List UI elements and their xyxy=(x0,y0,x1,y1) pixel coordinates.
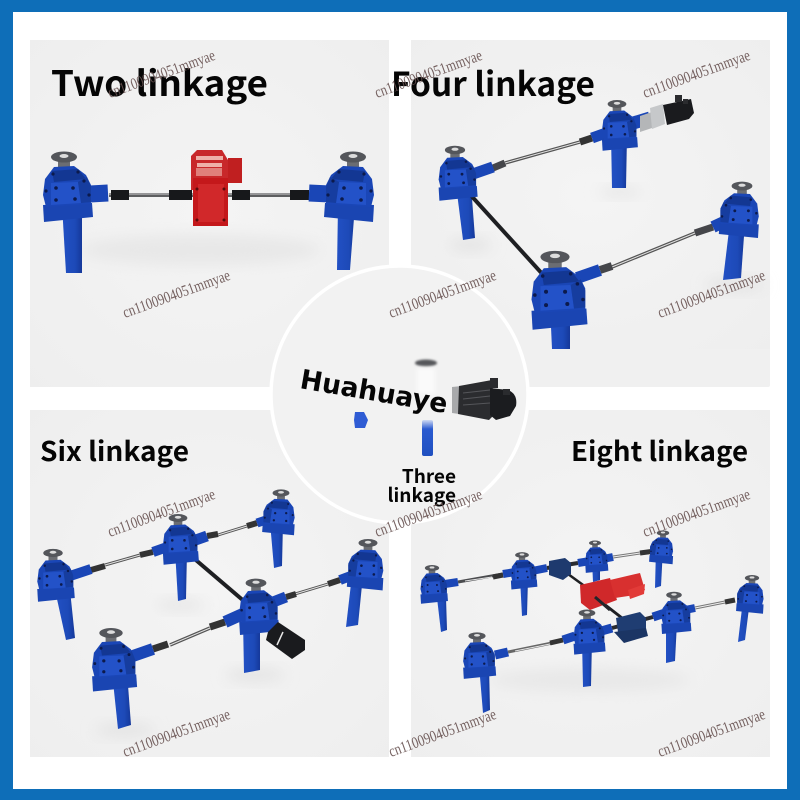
front shaft line xyxy=(495,600,735,655)
panel: two linkage xyxy=(30,40,389,387)
heading: two linkage: Two linkage xyxy=(51,56,268,107)
watermarks: cn1100904051mmyae xyxy=(387,706,499,761)
heading: eight linkage: Eight linkage xyxy=(571,430,748,469)
watermarks: cn1100904051mmyae xyxy=(106,486,218,541)
panel: four linkage xyxy=(411,40,770,387)
panel: eight linkage xyxy=(411,410,770,757)
diagram: two linkage jacks and red motor xyxy=(43,150,374,273)
watermarks: cn1100904051mmyae xyxy=(641,486,753,541)
heading: six linkage: Six linkage xyxy=(40,430,189,469)
rear shaft line xyxy=(445,551,655,584)
watermarks xyxy=(106,47,768,761)
heading: four linkage: Four linkage xyxy=(391,58,595,106)
watermarks: cn1100904051mmyae xyxy=(373,47,485,102)
panel: six linkage xyxy=(30,410,389,757)
icon: servo motor xyxy=(452,378,516,420)
watermarks: cn1100904051mmyae xyxy=(106,47,218,102)
watermarks: cn1100904051mmyae xyxy=(373,486,485,541)
watermarks: cn1100904051mmyae xyxy=(656,267,768,322)
diagram: four linkage jacks and servo motor xyxy=(439,95,765,349)
brand name: Huahuaye xyxy=(298,364,450,420)
watermarks: cn1100904051mmyae xyxy=(656,706,768,761)
diagram: eight linkage jacks, gearboxes and red motor xyxy=(420,530,764,713)
watermarks: cn1100904051mmyae xyxy=(387,267,499,322)
watermarks: cn1100904051mmyae xyxy=(641,47,753,102)
badge: three linkage circle xyxy=(271,266,528,523)
watermarks: cn1100904051mmyae xyxy=(121,267,233,322)
watermarks: cn1100904051mmyae xyxy=(121,706,233,761)
faded jack remains xyxy=(354,360,437,456)
label: three linkage: linkage xyxy=(388,481,456,508)
diagram: six linkage jacks and motor xyxy=(37,489,383,737)
label: three linkage: Three xyxy=(402,462,456,489)
